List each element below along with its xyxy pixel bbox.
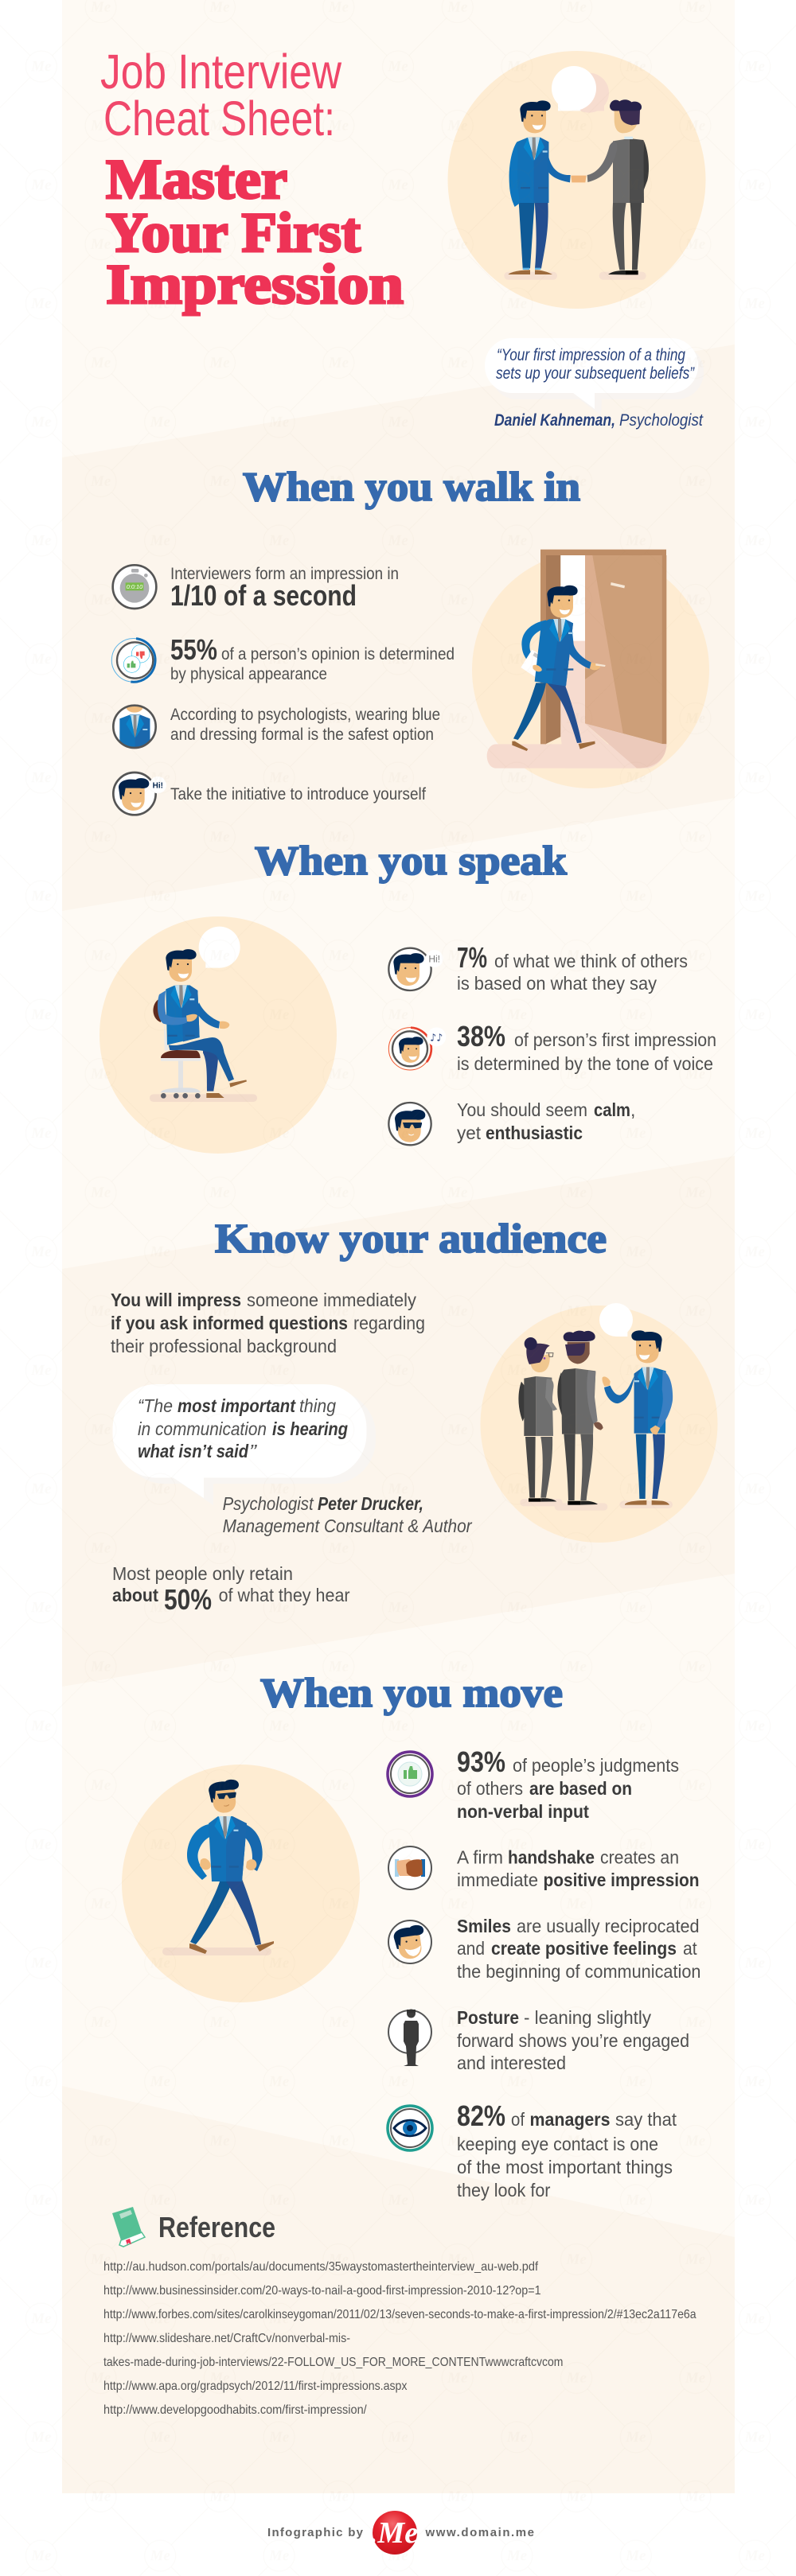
text: one tenth of a second: Interviewers form an impression in [170,565,399,583]
speech bubble [599,1303,633,1337]
title: Job Interview [100,45,342,99]
icon: opinion bubbles [111,638,155,682]
text: 7 percent: of what we think of others [494,951,688,971]
reference links: http://www.forbes.com/sites/carolkinseygoman/2011/02/13/seven-seconds-to-make-a-first-impression/2/#13ec2a117e6a [103,2308,696,2321]
title: Master [106,149,287,211]
text: 82 percent: 82% [457,2099,505,2132]
text: calm yet enthusiastic [457,1099,635,1143]
text: 82 percent: say that [615,2109,677,2130]
man in grey suit [587,99,649,280]
heading: when you speak: When you speak [255,839,567,884]
quote: Peter Drucker: “The [138,1395,173,1416]
text: informed questions: if you ask informed questions [111,1313,348,1333]
text: smiles: are usually reciprocated [517,1916,699,1936]
text: 7 percent [457,941,688,994]
door [487,550,666,769]
text: 55 percent: 55% [170,633,217,666]
title: Cheat Sheet: [103,91,335,146]
fact list: when you walk in [111,565,455,815]
text: 55 percent [170,633,455,683]
icon: standing posture [388,2010,431,2066]
text: retain 50 percent: of what they hear [219,1585,350,1605]
speech bubble [113,1384,376,1505]
icon: smiling face [388,1920,431,1963]
text: informed questions: You will impress [111,1290,241,1310]
text: calm yet enthusiastic: You should seem [457,1099,587,1120]
clasped hands [571,176,587,182]
icon: blue suit [113,701,156,749]
text: wear blue: and dressing formal is the safest option [170,726,434,744]
heading: reference: Reference [158,2211,275,2243]
quote: Daniel Kahneman: Daniel Kahneman, [494,411,615,430]
speech bubble [485,338,704,415]
text: wear blue: According to psychologists, wearing blue [170,706,440,724]
text: retain 50 percent: Most people only retain [112,1563,293,1584]
text: posture: - leaning slightly [524,2007,651,2028]
illustration: man walking with sunglasses [122,1765,360,2002]
text: posture: forward shows you’re engaged [457,2030,689,2051]
woman in grey suit [518,1337,563,1506]
illustration: two men shaking hands [447,51,705,309]
quote: Peter Drucker: Psychologist [223,1493,314,1514]
man in blue suit [504,100,571,280]
text: 38 percent [457,1020,716,1074]
quote: Peter Drucker: ” [249,1441,258,1461]
illustration: three people talking [481,1303,718,1543]
icon: tone of voice ring: ♪♪ [430,1031,443,1043]
quote: Peter Drucker: Peter Drucker, [318,1493,423,1514]
text: 93 percent: 93% [457,1745,505,1778]
footer: infographic credit: Infographic by [267,2526,364,2539]
reference links [103,2260,696,2417]
text: handshake [457,1847,699,1890]
text: one tenth of a second [170,565,399,612]
heading: when you move: When you move [260,1671,563,1716]
quote: Daniel Kahneman: Psychologist [619,411,704,430]
text: posture: and interested [457,2053,566,2073]
text: smiles [457,1916,700,1982]
text: 82 percent: of [511,2109,525,2130]
text: informed questions [111,1290,425,1356]
text: 55 percent: by physical appearance [170,665,327,683]
reference links: http://au.hudson.com/portals/au/documents/35waystomastertheinterview_au-web.pdf [103,2260,538,2274]
text: 7 percent: is based on what they say [457,973,657,994]
title: Your First [106,202,361,264]
text: handshake: positive impression [543,1870,699,1890]
icon: face with sunglasses [388,1103,431,1145]
text: retain 50 percent [112,1563,350,1616]
quote: Daniel Kahneman [485,338,704,430]
text: 38 percent: 38% [457,1020,505,1053]
heading: know your audience: Know your audience [215,1216,607,1262]
text: introduce yourself: Take the initiative to introduce yourself [170,785,426,804]
text: 82 percent: keeping eye contact is one [457,2134,658,2154]
text: informed questions: their professional background [111,1336,337,1356]
fact list: when you speak [388,941,716,1145]
text: wear blue [170,706,440,744]
icon: face saying hi: Hi! [153,782,163,791]
text: 93 percent: of others [457,1778,523,1799]
text: informed questions: regarding [353,1313,425,1333]
footer: infographic credit [267,2511,534,2555]
reference section [103,2207,696,2417]
icon: eye contact ring [388,2106,432,2150]
speech bubble [552,66,609,113]
title: Impression [106,254,404,316]
reference links: http://www.developgoodhabits.com/first-impression/ [103,2403,367,2417]
text: calm yet enthusiastic: yet [457,1123,482,1143]
quote: Daniel Kahneman: “Your first impression of a thing [497,346,685,364]
man in blue suit [158,949,247,1098]
text: handshake: handshake [508,1847,595,1868]
reference links: http://www.apa.org/gradpsych/2012/11/first-impressions.aspx [103,2379,408,2393]
text: smiles: and [457,1938,485,1959]
text: calm yet enthusiastic: calm [594,1099,630,1120]
text: one tenth of a second: 1/10 of a second [170,579,357,612]
icon: face saying hi [113,772,166,815]
text: handshake: A firm [457,1847,503,1868]
heading: when you walk in: When you walk in [243,465,580,510]
text: handshake: creates an [600,1847,679,1868]
text: 38 percent: is determined by the tone of voice [457,1053,713,1074]
man in blue suit [602,1330,673,1508]
chair [150,1000,257,1102]
man in grey suit, back view [555,1331,607,1511]
quote: Peter Drucker: Management Consultant & Author [223,1516,473,1536]
icon: face saying hi: Hi! [428,953,440,964]
icon: handshake [388,1846,431,1889]
reference links: http://www.businessinsider.com/20-ways-to-nail-a-good-first-impression-2010-12?op=1 [103,2284,541,2298]
icon: stopwatch [113,565,156,609]
illustration: seated man [100,916,337,1154]
icon: Me logo: .Me [370,2516,418,2550]
text: smiles: create positive feelings [491,1938,677,1959]
text: posture: Posture [457,2007,519,2028]
icon: green book [112,2207,145,2247]
text: 93 percent: are based on [529,1778,632,1799]
text: 93 percent: non-verbal input [457,1801,589,1822]
text: informed questions: someone immediately [247,1290,416,1310]
text: 82 percent: managers [530,2109,610,2130]
speech bubble [199,927,240,968]
text: retain 50 percent: about [112,1585,158,1605]
text: smiles: Smiles [457,1916,511,1936]
quote: Peter Drucker: most important [178,1395,296,1416]
icon: face saying hi [388,948,443,990]
text: retain 50 percent: 50% [164,1583,212,1616]
icon: thumbs up ring [388,1752,432,1796]
icon: tone of voice ring [388,1027,446,1070]
text: smiles: at [683,1938,697,1959]
quote: Daniel Kahneman: sets up your subsequent beliefs” [496,364,695,383]
text: 38 percent: of person’s first impression [514,1029,716,1050]
text: 93 percent [457,1745,679,1822]
text: 93 percent: of people’s judgments [513,1755,679,1776]
title [100,45,404,316]
text: posture [457,2007,689,2073]
quote: Peter Drucker: thing [299,1395,336,1416]
text: handshake: immediate [457,1870,538,1890]
footer: infographic credit: www.domain.me [425,2526,534,2539]
reference links: http://www.slideshare.net/CraftCv/nonverbal-mis- [103,2332,350,2345]
quote: Peter Drucker: in communication [138,1418,267,1439]
text: 55 percent: of a person’s opinion is determined [221,645,455,663]
illustration: man walking through door [472,550,709,788]
icon: stopwatch: 0:0:10 [127,583,143,590]
quote: Peter Drucker: what isn’t said [138,1441,249,1461]
quote: Peter Drucker: is hearing [272,1418,348,1439]
walking man [512,586,606,751]
text: 7 percent: 7% [457,941,487,974]
fact list: when you move [388,1745,700,2200]
reference links: takes-made-during-job-interviews/22-FOLLOW_US_FOR_MORE_CONTENTwwwcraftcvcom [103,2356,563,2369]
text: calm yet enthusiastic: enthusiastic [486,1123,583,1143]
text: smiles: the beginning of communication [457,1961,700,1982]
text: calm yet enthusiastic: , [630,1099,635,1120]
text: 82 percent: they look for [457,2180,551,2200]
text: 82 percent [457,2099,677,2200]
quote: Peter Drucker [113,1384,473,1536]
text: 82 percent: of the most important things [457,2157,673,2177]
